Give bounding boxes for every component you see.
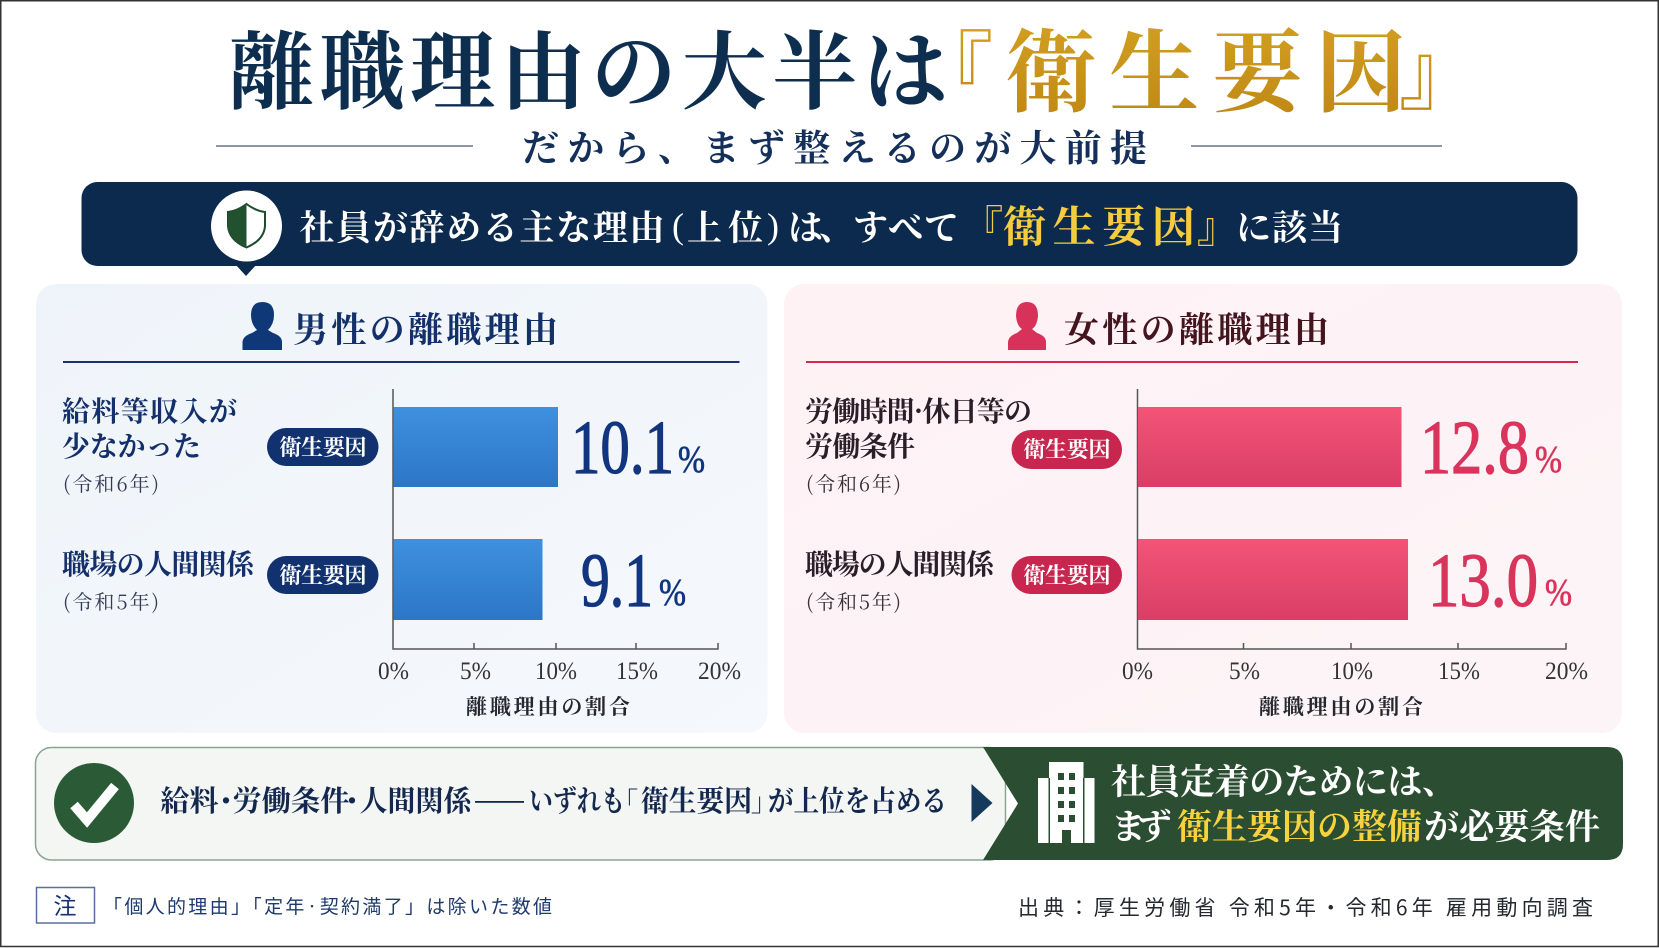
axis labels: 15% [1438,658,1480,685]
tag: hygiene [1012,430,1122,469]
summary box [36,748,1006,860]
summary text: 」 [751,782,777,819]
banner text [300,194,1343,255]
conclusion box [983,747,1623,860]
axis labels: 0% [378,658,409,685]
summary text: 給料 [160,779,218,820]
banner text: ) [767,206,779,246]
summary text: が上位を占める [768,779,947,820]
tag: hygiene [1012,556,1122,594]
conclusion text [1111,755,1600,850]
axis labels: 20% [1545,658,1588,685]
label: relations: 職場の人間関係 [805,543,996,583]
value: 9.1: 9.1 [581,539,653,623]
summary text: 人間関係 [360,779,473,820]
axis labels: 15% [616,658,658,685]
banner text: は、 [788,201,854,251]
note [36,887,552,923]
tag: hygiene [267,428,378,466]
summary text [160,779,947,820]
label: salary: 給料等収入が [62,390,237,430]
bar chart: male [378,389,741,721]
summary text: 労働条件 [232,779,350,820]
label: salary: (令和6年) [63,468,159,497]
subtitle: だから、まず整えるのが大前提 [522,118,1147,172]
value: 9.1: % [659,572,686,614]
axis labels: 0% [1122,658,1153,685]
banner text: 』 [1197,194,1240,255]
note: 注 [54,887,76,921]
title: 衛生要因 [1006,0,1406,130]
label: relations: 職場の人間関係 [62,543,256,583]
value: 10.1: % [678,439,705,481]
icon: shield badge [211,190,282,276]
banner text: 上位 [687,201,763,251]
panel: male [36,284,768,733]
title: 離職理由の大半は [229,5,948,127]
axis labels: 10% [1331,658,1373,685]
summary text: 「 [612,782,638,819]
banner text: 社員が辞める主な理由 [300,201,664,251]
banner [82,182,1578,276]
axis labels: 10% [535,658,577,685]
tag: hygiene: 衛生要因 [280,559,366,590]
banner text: 『 [960,194,1003,255]
icon: building [1038,762,1094,843]
axis labels [378,658,741,685]
source: 出典：厚生労働省 令和5年・令和6年 雇用動向調査 [1018,892,1593,922]
bar chart: female [1122,389,1588,721]
heading: female: 女性の離職理由 [1064,303,1329,353]
label: working hours: 労働時間·休日等の [805,390,1032,430]
label: working hours [805,390,1032,497]
summary text: ・ [212,780,240,820]
summary text: 衛生要因 [641,779,752,820]
bar: 10.1 [394,407,558,487]
icon: male person [242,302,282,350]
label: relations: (令和5年) [63,586,159,615]
tag: hygiene [267,556,378,594]
label: relations [62,543,256,615]
label: relations [805,543,996,615]
bar: 13.0 [1138,539,1408,620]
summary text: ・ [338,780,366,820]
title [229,0,1484,130]
tag: hygiene: 衛生要因 [280,431,366,462]
banner text: に該当 [1236,201,1343,251]
summary text: いずれも [529,779,625,820]
axis title: 離職理由の割合 [1259,691,1423,721]
axis title: 離職理由の割合 [466,691,630,721]
banner text: すべて [853,201,959,251]
heading: male: 男性の離職理由 [293,303,558,353]
bottom bar [36,747,1623,860]
tag: hygiene: 衛生要因 [1024,433,1110,464]
bar: 9.1 [394,539,542,620]
tag: hygiene: 衛生要因 [1024,559,1110,590]
axis labels: 5% [460,658,491,685]
axis labels [1122,658,1588,685]
label: working hours: (令和6年) [806,468,901,497]
value: 12.8: % [1535,439,1562,481]
panel: female [784,284,1622,733]
value: 10.1: 10.1 [571,406,674,490]
value: 12.8: 12.8 [1420,406,1529,490]
icon: female person [1008,302,1046,350]
label: working hours: 労働条件 [805,425,915,465]
conclusion text: 衛生要因の整備 [1177,800,1422,850]
value: 13.0: 13.0 [1428,539,1538,623]
label: relations: (令和5年) [806,586,901,615]
conclusion text: 社員定着のためには、 [1111,755,1457,805]
title: 『 [908,5,993,127]
value: 13.0: % [1545,572,1572,614]
icon: check [54,763,134,843]
label: salary [62,390,237,497]
arrow [972,784,992,822]
banner text: 衛生要因 [1003,194,1195,255]
axis labels: 5% [1229,658,1260,685]
conclusion text: まず [1111,800,1172,850]
title: 』 [1399,5,1484,127]
banner text: ( [672,206,684,246]
label: salary: 少なかった [62,425,201,465]
bar: 12.8 [1138,407,1402,487]
axis labels: 20% [698,658,741,685]
note: 「個人的理由」「定年·契約満了」は除いた数値 [103,892,552,919]
conclusion text: が必要条件 [1424,800,1600,850]
